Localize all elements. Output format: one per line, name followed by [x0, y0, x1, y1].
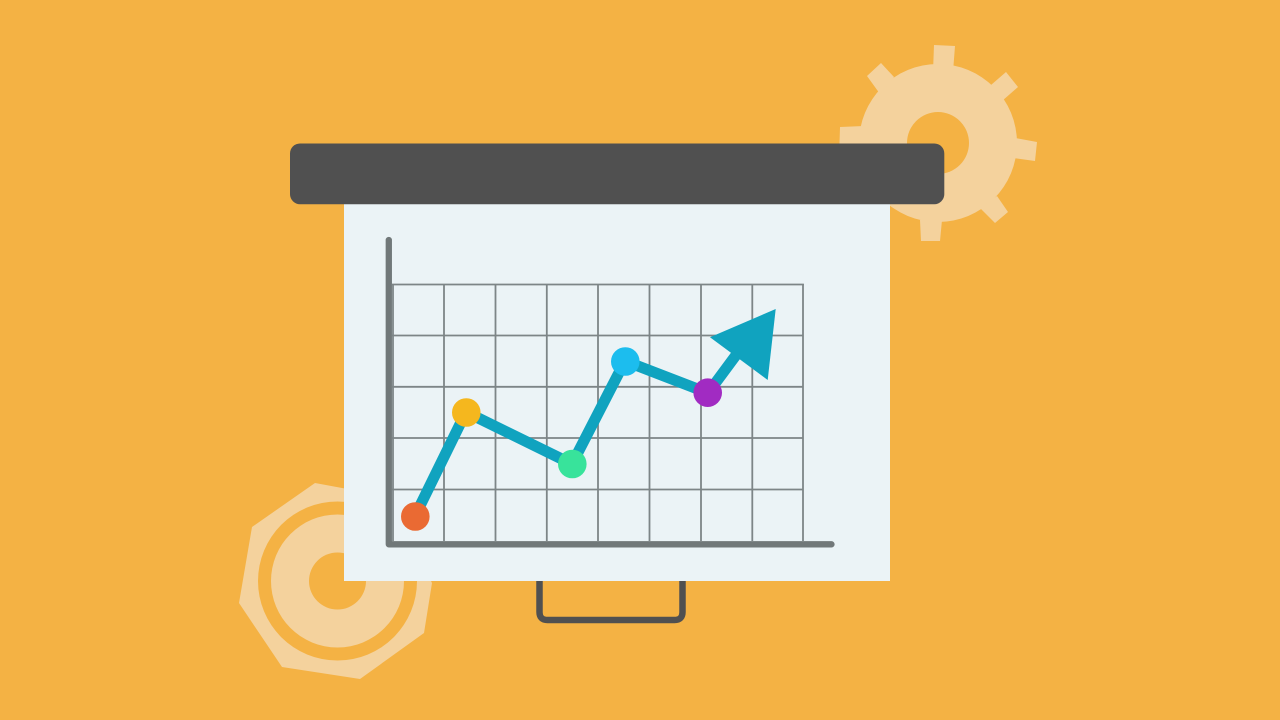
line chart trend: [415, 343, 745, 516]
chart grid: [392, 284, 804, 541]
icon: gear top right: [839, 45, 1037, 241]
projector screen handle: [540, 578, 682, 620]
data point: yellow: [452, 398, 481, 427]
panel: screen: [344, 200, 890, 581]
data point: blue: [611, 347, 640, 376]
icon: octagonal nut bottom left: [239, 483, 432, 679]
arrow head: [710, 309, 776, 380]
data point: orange: [401, 502, 430, 531]
data point: green: [558, 450, 587, 478]
data point: purple: [693, 378, 722, 407]
panel: screen roller bar: [290, 144, 944, 204]
chart axes: [389, 240, 832, 544]
